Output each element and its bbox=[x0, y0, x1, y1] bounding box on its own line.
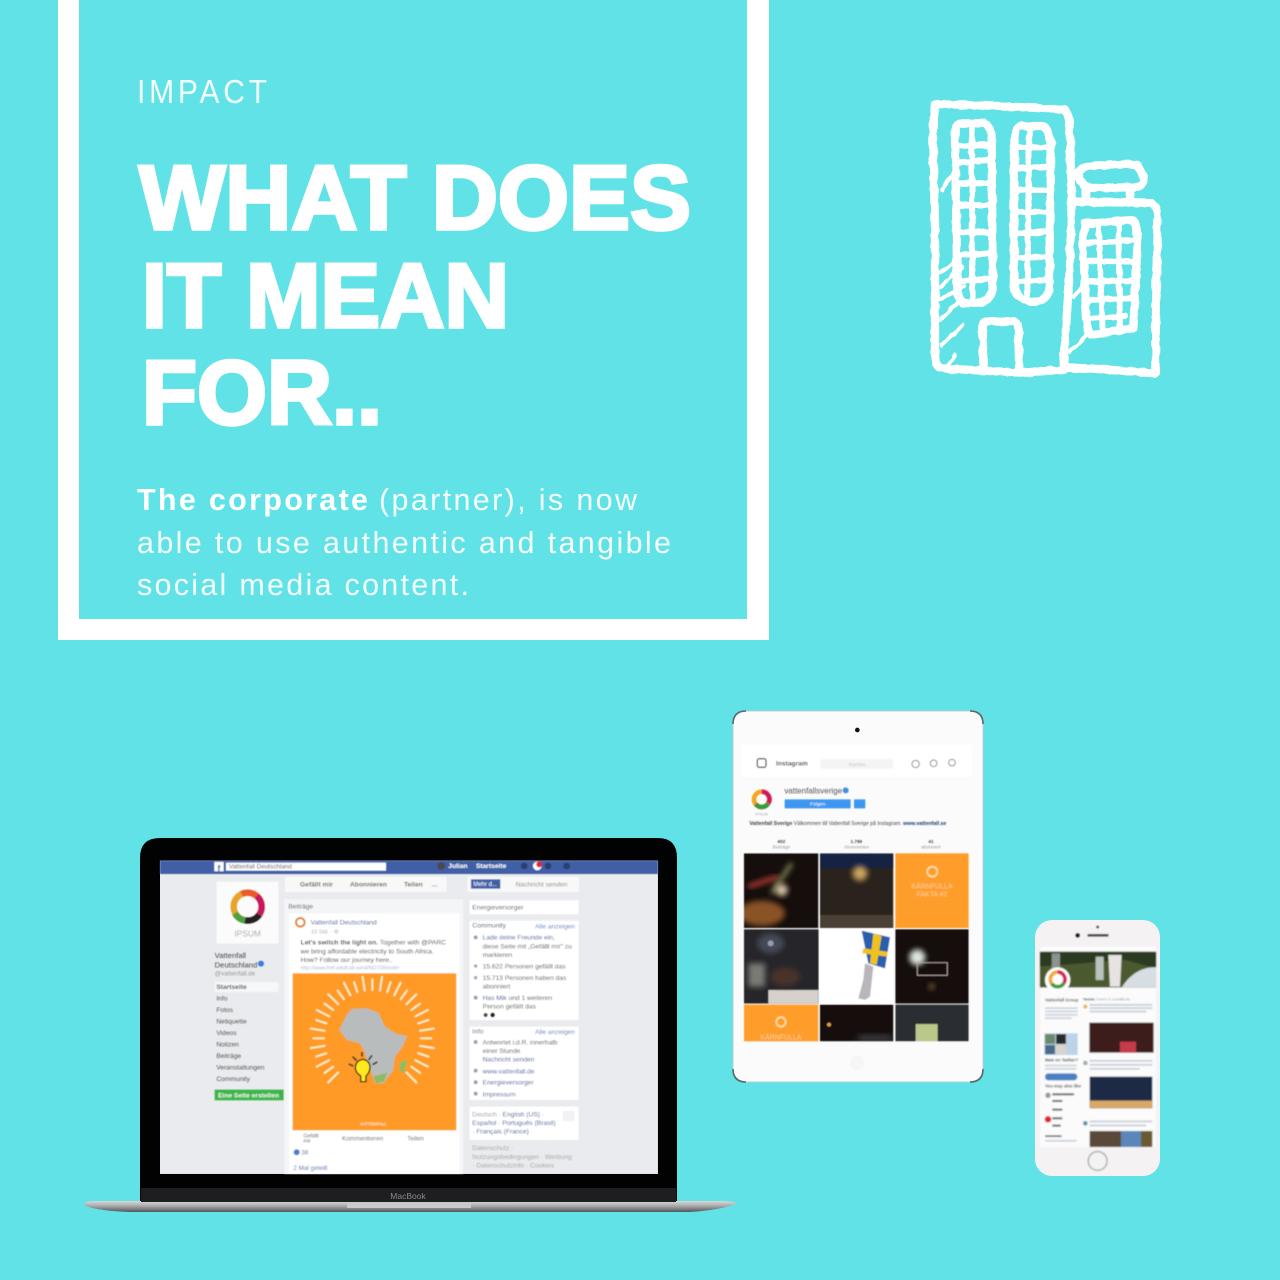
white frame panel bbox=[58, 0, 769, 640]
phone left column: Vattenfall Group bbox=[1045, 997, 1079, 1002]
laptop mockup: Facebook page bbox=[85, 838, 736, 1212]
Instagram profile bbox=[749, 786, 946, 849]
Instagram photo grid bbox=[738, 853, 969, 1041]
left profile column: Fotos bbox=[216, 1007, 234, 1014]
main heading bbox=[139, 148, 691, 444]
Instagram profile: vattenfallsverige bbox=[784, 786, 843, 795]
Facebook top bar: Startseite bbox=[476, 863, 507, 870]
photo tile: lamp at night bbox=[895, 929, 969, 1004]
tablet mockup: Instagram profile bbox=[733, 711, 983, 1082]
right sidebar: Español · Português (Brasil) bbox=[472, 1120, 556, 1127]
left profile column: Info bbox=[216, 995, 228, 1002]
laptop hinge notch bbox=[347, 1203, 471, 1208]
post reactions: Teilen bbox=[407, 1135, 424, 1142]
Instagram profile: Folgen bbox=[810, 802, 826, 808]
Instagram profile: Beiträge bbox=[773, 844, 790, 849]
right sidebar: einer Stunde bbox=[483, 1048, 521, 1055]
left profile column: Eine Seite erstellen bbox=[218, 1092, 279, 1099]
phone mockup: Twitter profile bbox=[1035, 920, 1160, 1176]
photo tile: night house bbox=[820, 853, 893, 928]
icon: hand-drawn office building bbox=[933, 104, 1157, 373]
photo tile: orange fact card: FAKTA #2 bbox=[917, 891, 948, 898]
post column: How? Follow our journey here.. bbox=[301, 957, 393, 964]
body text: able to use authentic and tangible bbox=[137, 526, 671, 560]
left profile column bbox=[215, 882, 284, 1100]
body text bbox=[137, 483, 671, 602]
photo tile: moon and room bbox=[744, 929, 819, 1004]
right sidebar: Alle anzeigen bbox=[535, 1029, 575, 1036]
photo tile: figure with Swedish flag bbox=[820, 929, 893, 1004]
body text: The corporate bbox=[137, 483, 368, 517]
action buttons row: Mehr d... bbox=[473, 882, 497, 888]
orange post image: VATTENFALL bbox=[360, 1122, 387, 1127]
left profile column: Vattenfall bbox=[215, 951, 246, 960]
right sidebar: Nachricht senden bbox=[483, 1057, 535, 1064]
Facebook top bar bbox=[160, 861, 658, 874]
right sidebar: Datenschutz · bbox=[472, 1145, 513, 1152]
left profile column: Startseite bbox=[216, 984, 247, 991]
post column: we bring affordable electricity to South Africa. bbox=[300, 948, 434, 955]
right sidebar: diese Seite mit „Gefällt mir" zu bbox=[483, 943, 572, 950]
right sidebar: Impressum bbox=[483, 1091, 516, 1098]
Instagram header: Instagram bbox=[776, 761, 808, 768]
left profile column: Videos bbox=[216, 1030, 237, 1037]
right sidebar: Alle anzeigen bbox=[535, 923, 575, 930]
Facebook top bar: Julian bbox=[448, 863, 468, 870]
right sidebar: Info bbox=[472, 1029, 484, 1036]
phone tabs row bbox=[1083, 998, 1131, 1002]
post reactions bbox=[293, 1133, 424, 1172]
Instagram page content bbox=[738, 745, 972, 1041]
action buttons row: Teilen bbox=[404, 882, 423, 889]
Facebook page content bbox=[160, 861, 658, 1174]
Instagram profile: 41 bbox=[928, 839, 934, 844]
action buttons row: Abonnieren bbox=[350, 882, 387, 889]
right sidebar: www.vattenfall.de bbox=[482, 1068, 535, 1075]
left profile column: Notizen bbox=[216, 1041, 239, 1048]
right sidebar: Deutsch · English (US) · bbox=[472, 1111, 544, 1118]
right sidebar bbox=[470, 900, 579, 1169]
right sidebar: Community bbox=[472, 923, 507, 930]
phone left column bbox=[1044, 997, 1082, 1142]
tablet corner shading bbox=[733, 711, 983, 1082]
tablet home button bbox=[850, 1055, 865, 1070]
tablet body bbox=[733, 711, 983, 1082]
phone tabs row: Tweets bbox=[1083, 998, 1095, 1002]
right sidebar: · Français (France) bbox=[472, 1129, 529, 1136]
body text: (partner), is now bbox=[379, 483, 638, 517]
Instagram profile: Vattenfall Sverige Välkommen till Vattenfall Sverige på Instagram. www.vattenfall.se bbox=[749, 820, 946, 827]
left profile column: @vattenfall.de bbox=[215, 970, 256, 977]
phone left column: You may also like bbox=[1045, 1083, 1082, 1088]
right sidebar: abonniert bbox=[483, 984, 511, 991]
right sidebar: Antwortet i.d.R. innerhalb bbox=[483, 1039, 558, 1046]
post column: Let's switch the light on. Together with @PARC bbox=[301, 940, 446, 947]
Facebook top bar: Vattenfall Deutschland bbox=[229, 864, 292, 871]
body text: social media content. bbox=[137, 568, 469, 602]
phone cover photo bbox=[1040, 952, 1156, 988]
orange post image bbox=[293, 973, 456, 1130]
phone left column: New on Twitter? bbox=[1045, 1058, 1078, 1063]
right sidebar: Energieversorger bbox=[472, 905, 524, 912]
photo tile: projector screen bbox=[895, 1005, 969, 1041]
post reactions: mir bbox=[303, 1138, 311, 1144]
phone home button bbox=[1088, 1152, 1107, 1170]
laptop bezel bbox=[140, 838, 677, 1201]
post reactions: 2 Mal geteilt bbox=[293, 1165, 328, 1172]
photo tile: second orange card bbox=[744, 1005, 818, 1041]
right sidebar: Has Mik und 1 weiteren bbox=[483, 995, 552, 1002]
right sidebar: Person gefällt das bbox=[483, 1004, 537, 1011]
Africa map bbox=[339, 1008, 407, 1083]
action buttons row: ... bbox=[432, 882, 437, 889]
left profile column: Veranstaltungen bbox=[216, 1065, 265, 1072]
phone screen bbox=[1040, 947, 1156, 1147]
photo tile: orange fact card: KÄRNFULLA bbox=[911, 883, 953, 891]
left profile column: IPSUM bbox=[234, 928, 261, 938]
right sidebar: Nutzungsbedingungen · Werbung bbox=[472, 1154, 572, 1161]
phone profile logo bbox=[1045, 967, 1070, 993]
right sidebar: · Datenschutzinfo · Cookies bbox=[472, 1162, 555, 1169]
phone body bbox=[1035, 920, 1160, 1176]
post reactions: Kommentieren bbox=[342, 1135, 384, 1142]
right sidebar: 15.622 Personen gefällt das bbox=[483, 963, 566, 970]
post reactions: 38 bbox=[301, 1150, 309, 1157]
phone tabs row: Media bbox=[1120, 998, 1131, 1002]
laptop base bbox=[85, 1201, 736, 1212]
post reactions: Gefällt bbox=[303, 1133, 319, 1139]
Instagram profile: IPSUM bbox=[755, 811, 768, 816]
post column: Beiträge bbox=[288, 903, 313, 910]
photo tile: orange fact card bbox=[895, 853, 969, 928]
post column: http://www.fref-adult.kit-wind/ND7/Wonder bbox=[301, 965, 400, 971]
eyebrow label: IMPACT: IMPACT bbox=[137, 72, 267, 110]
phone tweets bbox=[1083, 1004, 1154, 1147]
main heading: IT MEAN bbox=[142, 246, 509, 347]
laptop brand label: MacBook bbox=[390, 1191, 426, 1201]
Facebook screen bbox=[160, 861, 658, 1174]
post column: Vattenfall Deutschland bbox=[311, 920, 377, 927]
light bulb bbox=[349, 1052, 377, 1082]
main heading: FOR.. bbox=[142, 343, 382, 444]
main heading: WHAT DOES bbox=[139, 148, 691, 249]
Instagram profile: abonniert bbox=[921, 844, 941, 849]
post column: 10 Std. · ⚙ bbox=[311, 929, 339, 936]
laptop chin bbox=[141, 1188, 676, 1202]
left profile column: Netiquette bbox=[216, 1018, 247, 1025]
phone tabs row: Tweets & replies bbox=[1096, 998, 1123, 1002]
tablet camera bbox=[855, 728, 860, 732]
Instagram profile: Abonnenten bbox=[844, 844, 869, 849]
post column bbox=[284, 899, 463, 1174]
Instagram profile: 1.799 bbox=[850, 839, 863, 844]
right sidebar: Lade deine Freunde ein, bbox=[483, 935, 555, 942]
photo tile: street lights bbox=[738, 853, 818, 928]
Instagram header bbox=[742, 745, 972, 777]
photo tile: second orange card: KÄRNFULLA bbox=[760, 1033, 802, 1041]
photo tile: night street bbox=[820, 1005, 893, 1041]
right sidebar: Energieversorger bbox=[483, 1080, 534, 1087]
Instagram profile: 402 bbox=[777, 839, 786, 844]
action buttons row: Nachricht senden bbox=[516, 882, 568, 889]
Facebook top bar: f bbox=[217, 863, 221, 873]
right sidebar: 15.713 Personen haben das bbox=[483, 975, 567, 982]
left profile column: Beiträge bbox=[216, 1053, 241, 1060]
left profile column: Community bbox=[216, 1076, 251, 1083]
action buttons row bbox=[285, 877, 579, 892]
left profile column: Deutschland bbox=[215, 960, 257, 969]
Instagram header: Suchen bbox=[849, 762, 866, 768]
right sidebar: markieren bbox=[483, 952, 513, 959]
phone speaker and camera bbox=[1076, 926, 1108, 937]
sun rays bbox=[311, 977, 434, 1082]
action buttons row: Gefällt mir bbox=[300, 882, 333, 889]
